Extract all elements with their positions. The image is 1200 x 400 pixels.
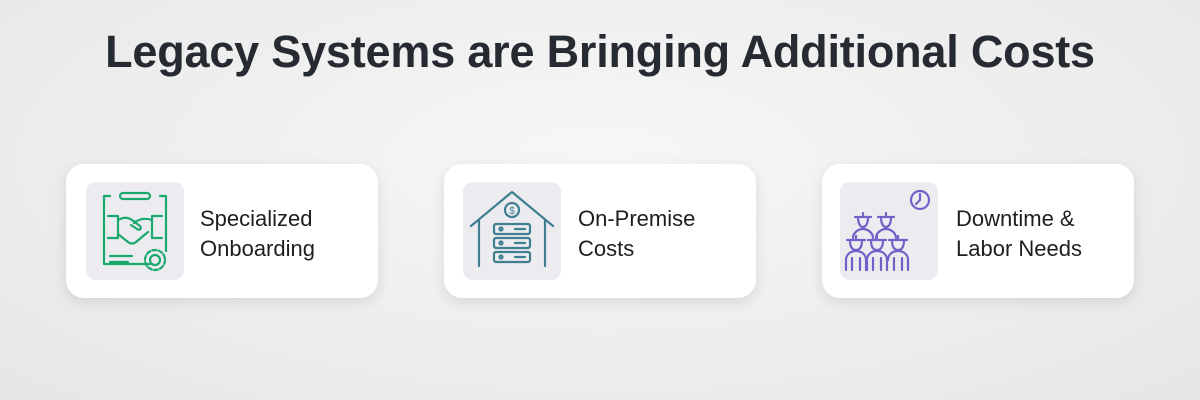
label: Costs: [578, 236, 634, 261]
label: Downtime &: [956, 206, 1075, 231]
label: [200, 206, 315, 261]
label: On-Premise: [578, 206, 695, 231]
icon: workers with clock: [840, 182, 938, 280]
card: on-premise costs: [444, 164, 756, 298]
icon: clipboard handshake: [86, 182, 184, 280]
label: Onboarding: [200, 236, 315, 261]
icon: server house: $: [509, 206, 515, 217]
label: Labor Needs: [956, 236, 1082, 261]
label: Specialized: [200, 206, 313, 231]
label: [956, 206, 1082, 261]
title: Legacy Systems are Bringing Additional Costs: [105, 26, 1095, 77]
card: specialized onboarding: [66, 164, 378, 298]
card: downtime & labor: [822, 164, 1134, 298]
label: [578, 206, 695, 261]
icon: server house: [463, 182, 561, 280]
